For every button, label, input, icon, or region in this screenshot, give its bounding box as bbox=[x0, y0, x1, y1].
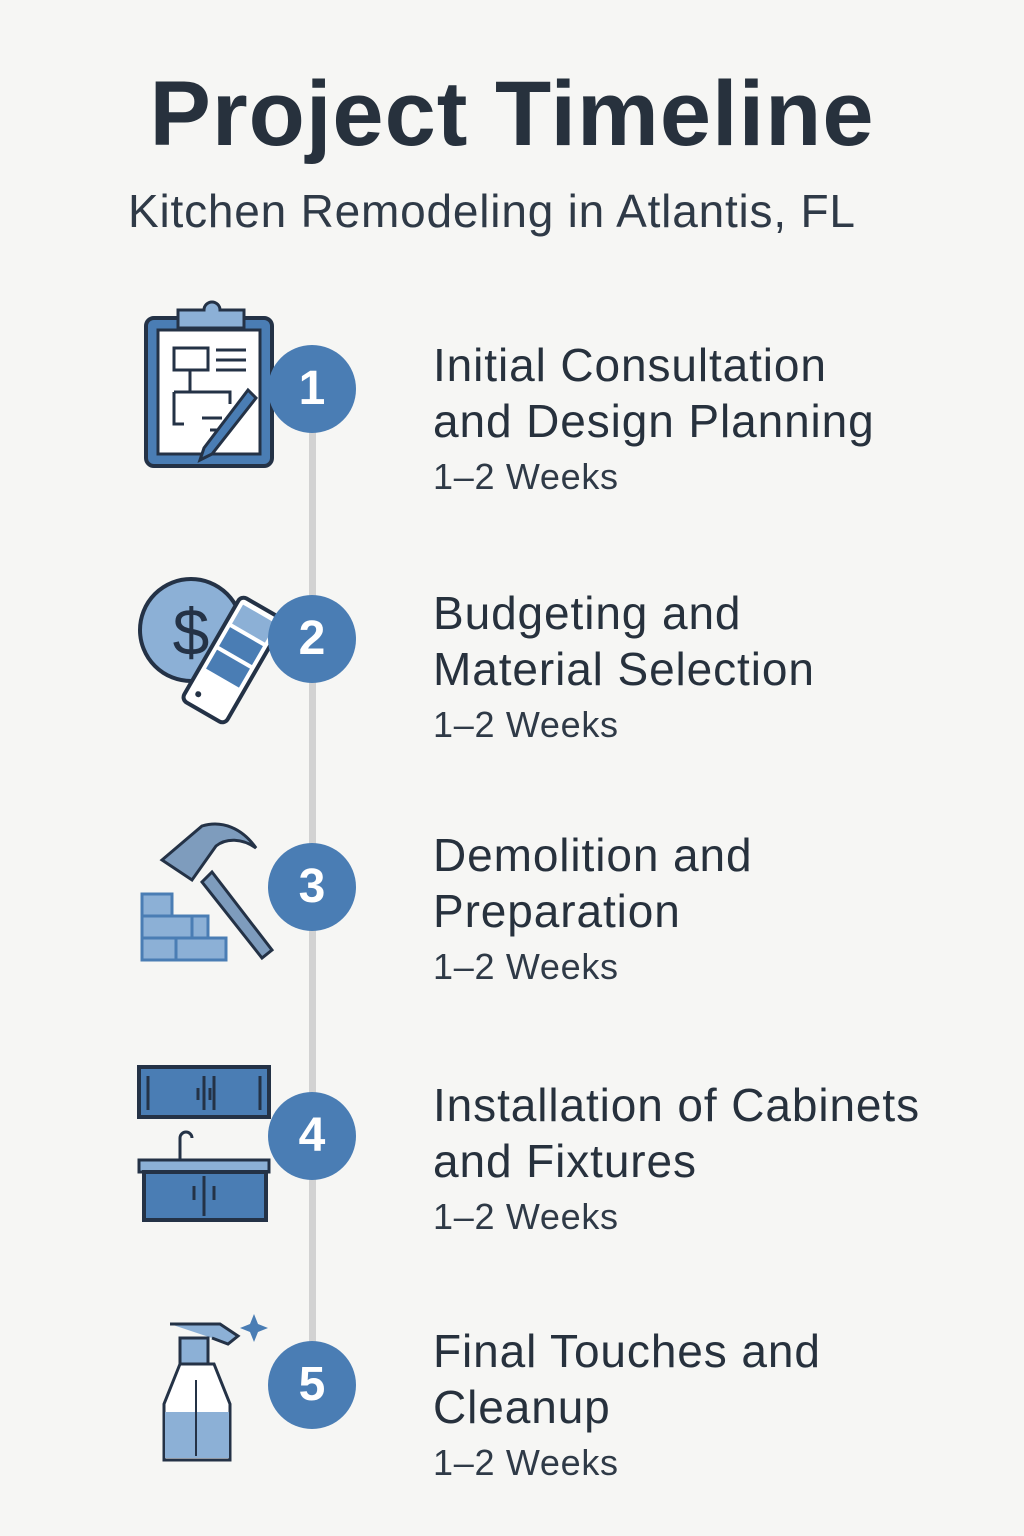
step 1 text: 1–2 Weeks bbox=[433, 456, 619, 497]
title: Project Timeline bbox=[149, 63, 874, 165]
subtitle: Kitchen Remodeling in Atlantis, FL bbox=[128, 185, 856, 237]
step 4 text: 1–2 Weeks bbox=[433, 1196, 619, 1237]
step 2 number: 2 bbox=[299, 612, 325, 665]
step 2 text: Material Selection bbox=[433, 643, 815, 695]
step 1 number: 1 bbox=[299, 362, 325, 415]
step 3 number: 3 bbox=[299, 860, 325, 913]
step 4 text: Installation of Cabinets bbox=[433, 1079, 920, 1131]
step 4 number: 4 bbox=[299, 1109, 325, 1162]
step 3 text: Demolition and bbox=[433, 829, 752, 881]
step 5 text: Cleanup bbox=[433, 1381, 611, 1433]
step 2 text bbox=[433, 587, 815, 745]
step 3 text bbox=[433, 829, 752, 987]
step 2 number bbox=[268, 595, 356, 683]
step 5 text bbox=[433, 1325, 821, 1483]
step 5 text: Final Touches and bbox=[433, 1325, 821, 1377]
step 4 text: and Fixtures bbox=[433, 1135, 697, 1187]
step 1 text bbox=[433, 339, 875, 497]
icon: cabinets bbox=[137, 1065, 271, 1222]
step 3 text: 1–2 Weeks bbox=[433, 946, 619, 987]
step 3 text: Preparation bbox=[433, 885, 681, 937]
icon: money and swatches bbox=[138, 577, 276, 724]
step 5 number bbox=[268, 1341, 356, 1429]
step 1 text: Initial Consultation bbox=[433, 339, 827, 391]
icon: spray bottle bbox=[162, 1314, 268, 1462]
step 3 number bbox=[268, 843, 356, 931]
step 1 text: and Design Planning bbox=[433, 395, 875, 447]
step 1 number bbox=[268, 345, 356, 433]
step 2 text: 1–2 Weeks bbox=[433, 704, 619, 745]
step 5 number: 5 bbox=[299, 1358, 325, 1411]
icon: clipboard bbox=[144, 300, 274, 468]
step 4 text bbox=[433, 1079, 920, 1237]
step 4 number bbox=[268, 1092, 356, 1180]
step 5 text: 1–2 Weeks bbox=[433, 1442, 619, 1483]
timeline line bbox=[309, 420, 316, 1360]
icon: money and swatches: $ bbox=[173, 595, 209, 669]
icon: hammer and bricks bbox=[140, 822, 274, 962]
step 2 text: Budgeting and bbox=[433, 587, 741, 639]
